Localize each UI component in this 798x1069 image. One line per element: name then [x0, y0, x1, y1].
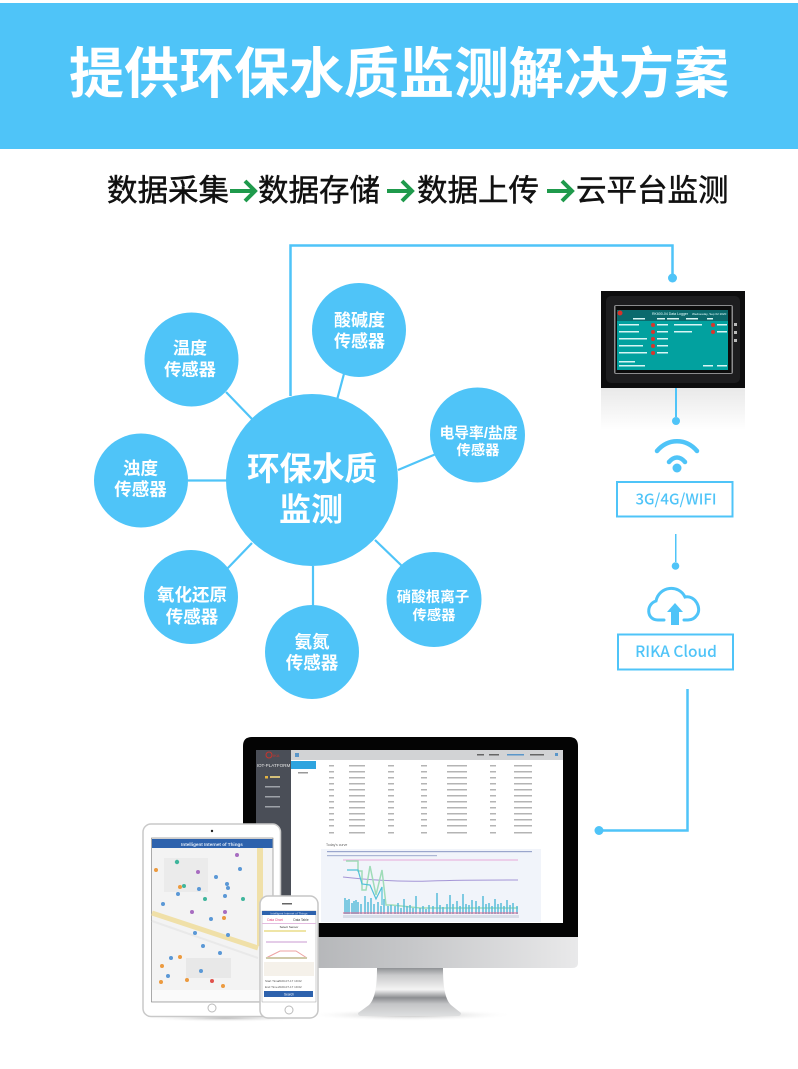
hub circle: water quality monitoring: 环保水质	[247, 451, 377, 487]
sensor: conductivity and salinity: 传感器	[457, 441, 500, 459]
connector: screen to wifi	[672, 388, 680, 425]
sensor: turbidity: 传感器	[114, 480, 167, 500]
tablet with map	[140, 824, 310, 1022]
sensor: redox: 氧化还原	[157, 585, 227, 605]
sensor: ammonia nitrogen	[265, 605, 359, 699]
connector: wifi to cloud	[672, 534, 679, 570]
sensor: pH: 酸碱度	[334, 311, 385, 330]
process flow heading: 数据采集	[107, 174, 229, 208]
sensor: conductivity and salinity: 电导率/盐度	[439, 424, 518, 442]
smartphone with app	[260, 896, 318, 1018]
app chart	[266, 942, 307, 959]
map roads	[152, 913, 258, 948]
platform tabs	[291, 761, 316, 769]
header banner	[0, 3, 798, 149]
sensor: nitrate: 硝酸根离子	[397, 588, 469, 606]
sensor: turbidity	[94, 434, 188, 528]
touch screen data logger: Wednesday, Sep 02 2020	[692, 312, 727, 316]
sensor: ammonia nitrogen: 传感器	[286, 653, 339, 673]
map header: Intelligent Internet of Things	[181, 842, 243, 847]
sensor: temperature: 温度	[173, 339, 207, 358]
smartphone with app: End Time	[265, 985, 278, 989]
platform sidebar: IOT-PLATFORM	[257, 763, 290, 768]
map markers	[154, 853, 245, 988]
platform top bar	[291, 750, 563, 760]
sensor: ammonia nitrogen: 氨氮	[294, 632, 330, 652]
arrows	[230, 181, 572, 201]
process flow heading: 数据上传	[417, 174, 539, 208]
label box: RIKA Cloud: RIKA Cloud	[635, 640, 717, 662]
process flow heading	[107, 174, 728, 208]
label box: 3G/4G/WIFI	[617, 482, 732, 516]
platform sidebar	[256, 750, 291, 923]
touch screen data logger	[601, 291, 745, 430]
map header	[152, 839, 272, 848]
smartphone with app: Start Time	[265, 979, 279, 983]
sensor: pH: 传感器	[334, 331, 385, 351]
line chart: today's curve	[321, 843, 541, 922]
sensor: nitrate	[386, 552, 482, 647]
connector: hub to touch screen	[290, 246, 677, 396]
icon: cloud upload	[649, 588, 699, 625]
sensor: conductivity and salinity	[430, 388, 525, 482]
platform sidebar: IKA	[273, 753, 280, 758]
title: 提供环保水质监测解决方案	[69, 43, 729, 105]
sensor: nitrate: 传感器	[413, 606, 456, 624]
sensor: turbidity: 浊度	[123, 458, 158, 478]
desktop monitor with platform	[243, 737, 578, 1021]
sensor: temperature: 传感器	[164, 360, 217, 380]
smartphone with app: 2020-07-17 19:02	[278, 979, 302, 983]
search button: Search	[284, 992, 294, 996]
process flow heading: 数据存储	[258, 174, 380, 208]
smartphone with app: 2020-07-17 19:02	[278, 985, 302, 989]
process flow heading: 云平台监测	[576, 174, 728, 208]
smartphone with app: Select Sensor	[280, 925, 298, 929]
sensor: redox	[144, 550, 238, 644]
sensor: redox: 传感器	[166, 607, 219, 627]
connector: cloud to monitoring platform	[594, 689, 688, 835]
line chart: today's curve: Today's curve	[326, 843, 347, 847]
icon: wifi	[657, 441, 697, 472]
sensor: temperature	[144, 312, 238, 406]
label box: RIKA Cloud	[618, 634, 733, 670]
smartphone with app: Data Chart	[267, 918, 283, 922]
app header: Intelligent Internet of Things	[271, 912, 308, 916]
smartphone with app: Data Table	[293, 918, 309, 922]
sensor: pH	[312, 283, 406, 377]
hub circle: water quality monitoring: 监测	[279, 492, 343, 528]
spokes between hub and sensors	[188, 370, 436, 606]
label box: 3G/4G/WIFI: 3G/4G/WIFI	[635, 488, 717, 510]
data table	[329, 765, 532, 834]
map bottom nav	[152, 990, 272, 1001]
touch screen data logger: RK600-04 Data Logger	[652, 312, 689, 316]
hub circle: water quality monitoring	[226, 394, 398, 566]
